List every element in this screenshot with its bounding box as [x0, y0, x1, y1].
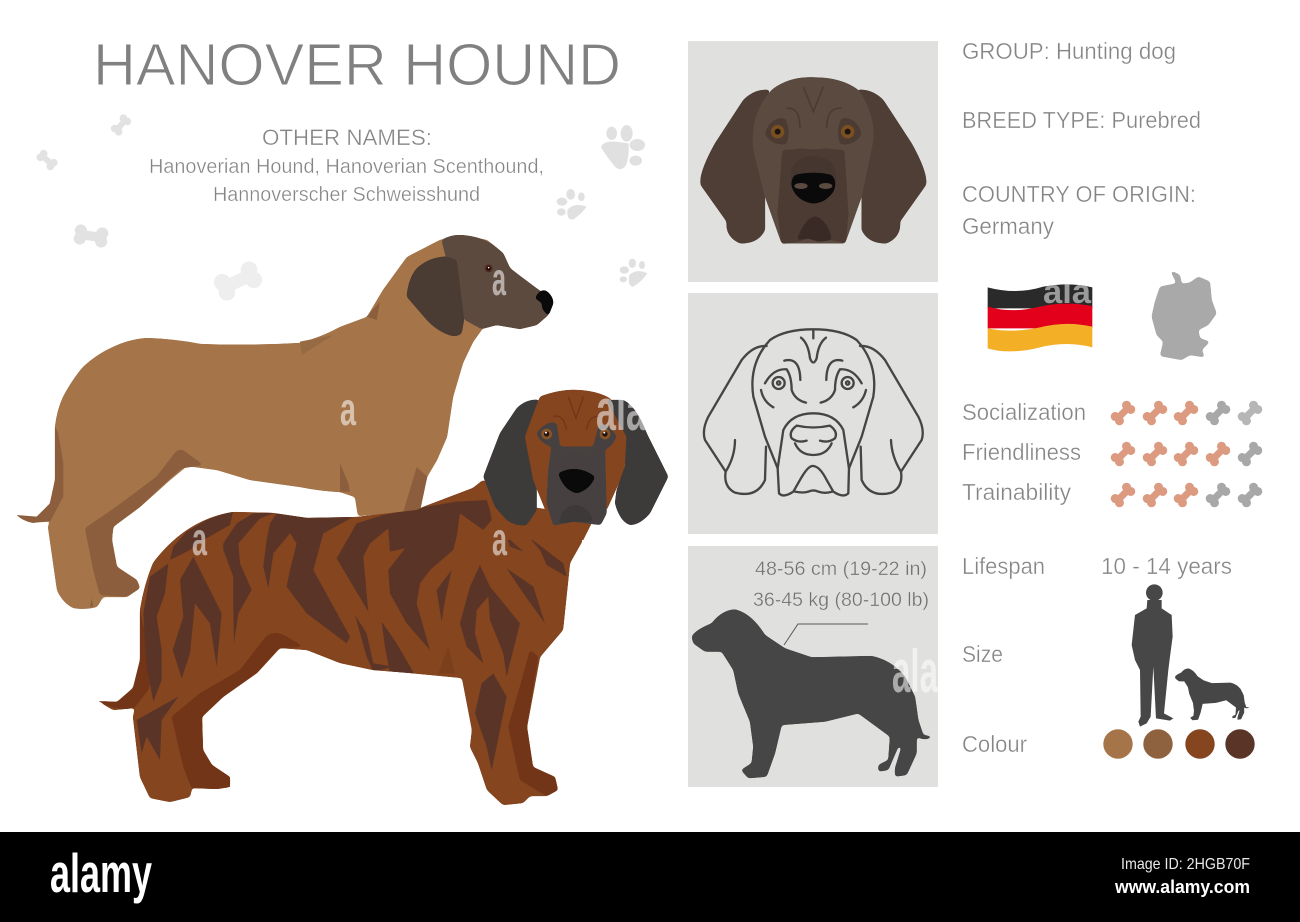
tan dog illustration — [16, 235, 553, 609]
rating: trainability — [962, 479, 1264, 509]
icon: map of Germany — [1152, 270, 1217, 360]
tan dog shading — [17, 335, 333, 607]
breed facts text — [962, 38, 1201, 239]
brindle dog body — [98, 480, 583, 805]
icon: small dog silhouette — [1175, 668, 1249, 720]
alamy logo: alamy — [50, 842, 152, 904]
dog face in colour — [700, 77, 926, 244]
colour swatches: Colour — [962, 731, 1027, 757]
stock watermarks — [192, 253, 938, 705]
panel: size and weight — [688, 546, 938, 787]
rating: socialization: Socialization — [962, 399, 1086, 425]
stock watermarks: a — [192, 513, 207, 565]
tan dog body — [16, 235, 553, 609]
size comparison: Size — [962, 641, 1003, 667]
rating: trainability: Trainability — [962, 479, 1071, 505]
other names text block: Hannoverscher Schweisshund — [213, 184, 480, 206]
size comparison — [962, 584, 1249, 727]
decorative bones — [35, 113, 265, 303]
icon: human silhouette — [1132, 584, 1173, 727]
icon: German flag: ala — [1043, 273, 1092, 311]
other names text block: Hanoverian Hound, Hanoverian Scenthound, — [149, 156, 544, 178]
decorative paw prints — [557, 125, 647, 287]
rating: friendliness: Friendliness — [962, 439, 1081, 465]
panel: coloured head — [688, 41, 938, 282]
leader line — [784, 624, 868, 645]
rating: socialization — [962, 399, 1264, 427]
stock watermarks: ala — [892, 638, 938, 705]
lifespan: Lifespan — [962, 553, 1045, 579]
other names text block — [149, 125, 544, 206]
brindle dog stripes — [137, 500, 567, 770]
lifespan: 10 - 14 years — [1101, 553, 1232, 579]
weight text: 36-45 kg (80-100 lb) — [753, 590, 929, 611]
dog silhouette — [692, 609, 933, 778]
brindle dog shaded legs — [98, 610, 558, 796]
stock watermarks: a — [492, 513, 507, 565]
tan dog head — [340, 235, 553, 512]
lifespan — [962, 553, 1232, 579]
stock watermarks: a — [340, 383, 356, 435]
icon: German flag — [988, 284, 1092, 352]
colour swatches — [962, 729, 1255, 759]
height text: 48-56 cm (19-22 in) — [755, 559, 927, 580]
stock watermarks: ala — [596, 378, 646, 443]
footer bar — [0, 832, 1300, 922]
breed facts text: COUNTRY OF ORIGIN: — [962, 181, 1196, 207]
breed facts text: BREED TYPE: Purebred — [962, 107, 1201, 133]
rating: friendliness — [962, 439, 1264, 468]
brindle dog illustration — [98, 390, 668, 805]
breed facts text: Germany — [962, 213, 1054, 239]
other names text block: OTHER NAMES: — [262, 125, 432, 150]
stock watermarks: a — [492, 253, 506, 305]
brindle dog head — [483, 390, 668, 540]
image id: Image ID: 2HGB70F — [1121, 856, 1250, 873]
breed facts text: GROUP: Hunting dog — [962, 38, 1176, 64]
dog face outline — [704, 329, 923, 495]
panel: line art head — [688, 293, 938, 534]
website: www.alamy.com — [1114, 877, 1250, 897]
title: HANOVER HOUND — [93, 32, 621, 98]
